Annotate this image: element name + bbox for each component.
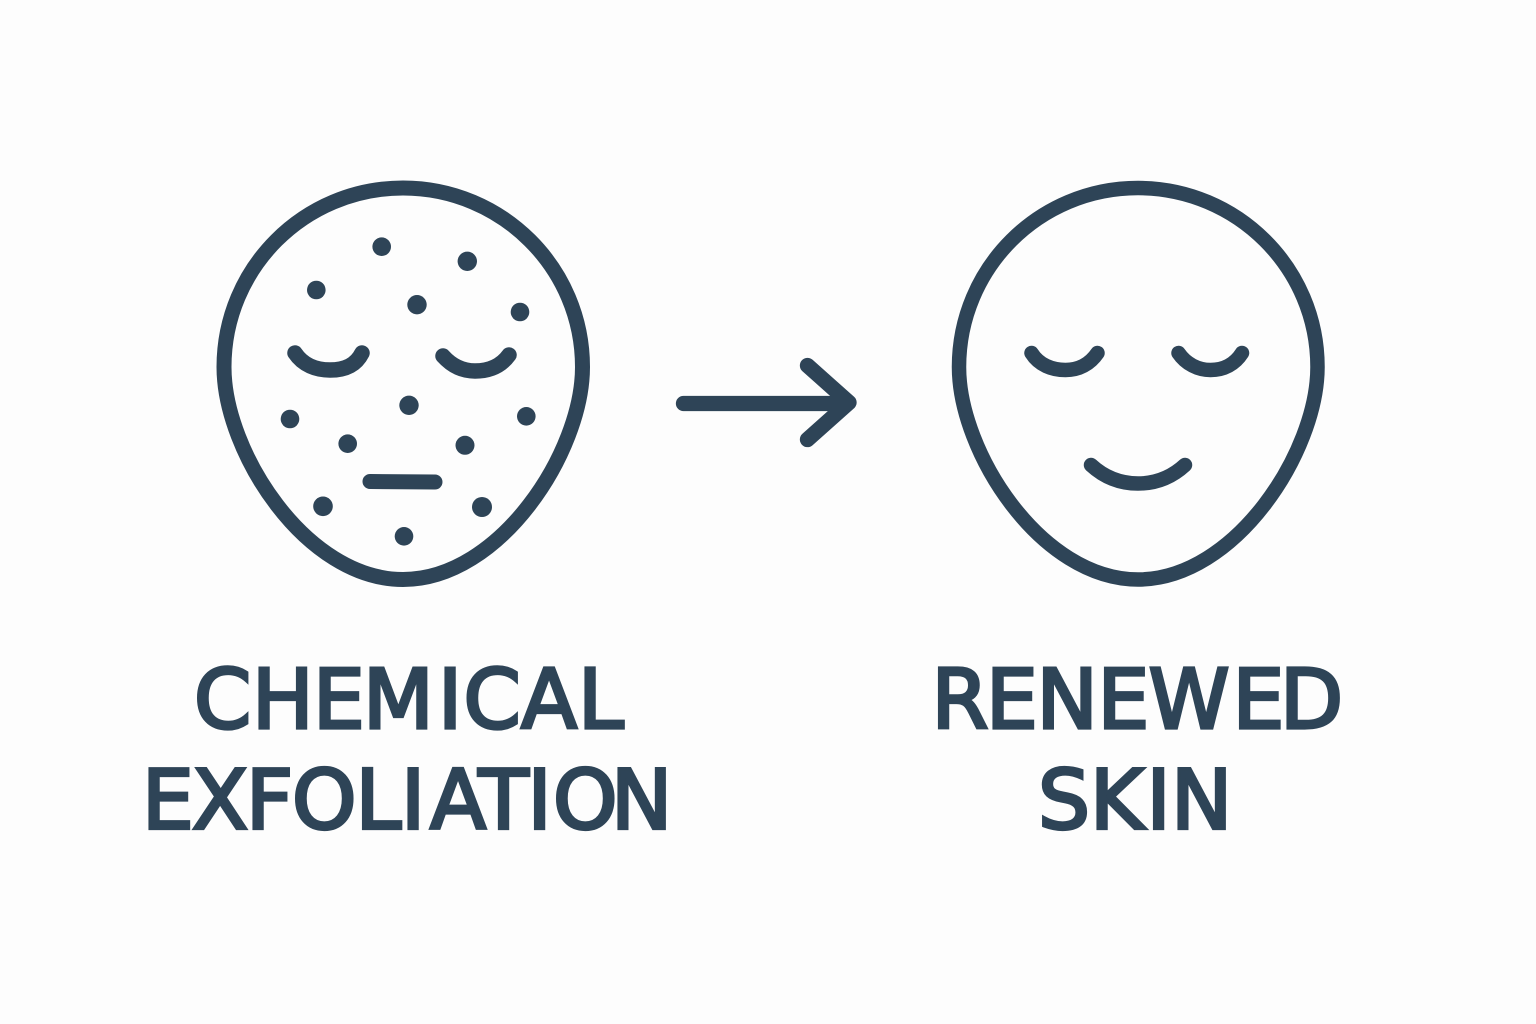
arrow [684, 366, 849, 440]
left eye [295, 353, 362, 370]
right eye [1178, 353, 1242, 370]
label: chemical exfoliation: EXFOLIATION [142, 754, 672, 848]
label: renewed skin [932, 653, 1343, 848]
blemishes [281, 237, 536, 546]
face outline left [224, 188, 582, 580]
right eye [443, 355, 509, 371]
smile [1091, 465, 1185, 484]
label: renewed skin: SKIN [1038, 754, 1232, 848]
icon: face with blemishes [224, 188, 582, 580]
left eye [1032, 353, 1098, 370]
icon: renewed smiling face [959, 188, 1318, 580]
flat mouth [370, 474, 435, 490]
label: chemical exfoliation: CHEMICAL [194, 653, 624, 748]
label: chemical exfoliation [142, 653, 672, 848]
face outline right [959, 188, 1318, 580]
label: renewed skin: RENEWED [932, 653, 1343, 748]
